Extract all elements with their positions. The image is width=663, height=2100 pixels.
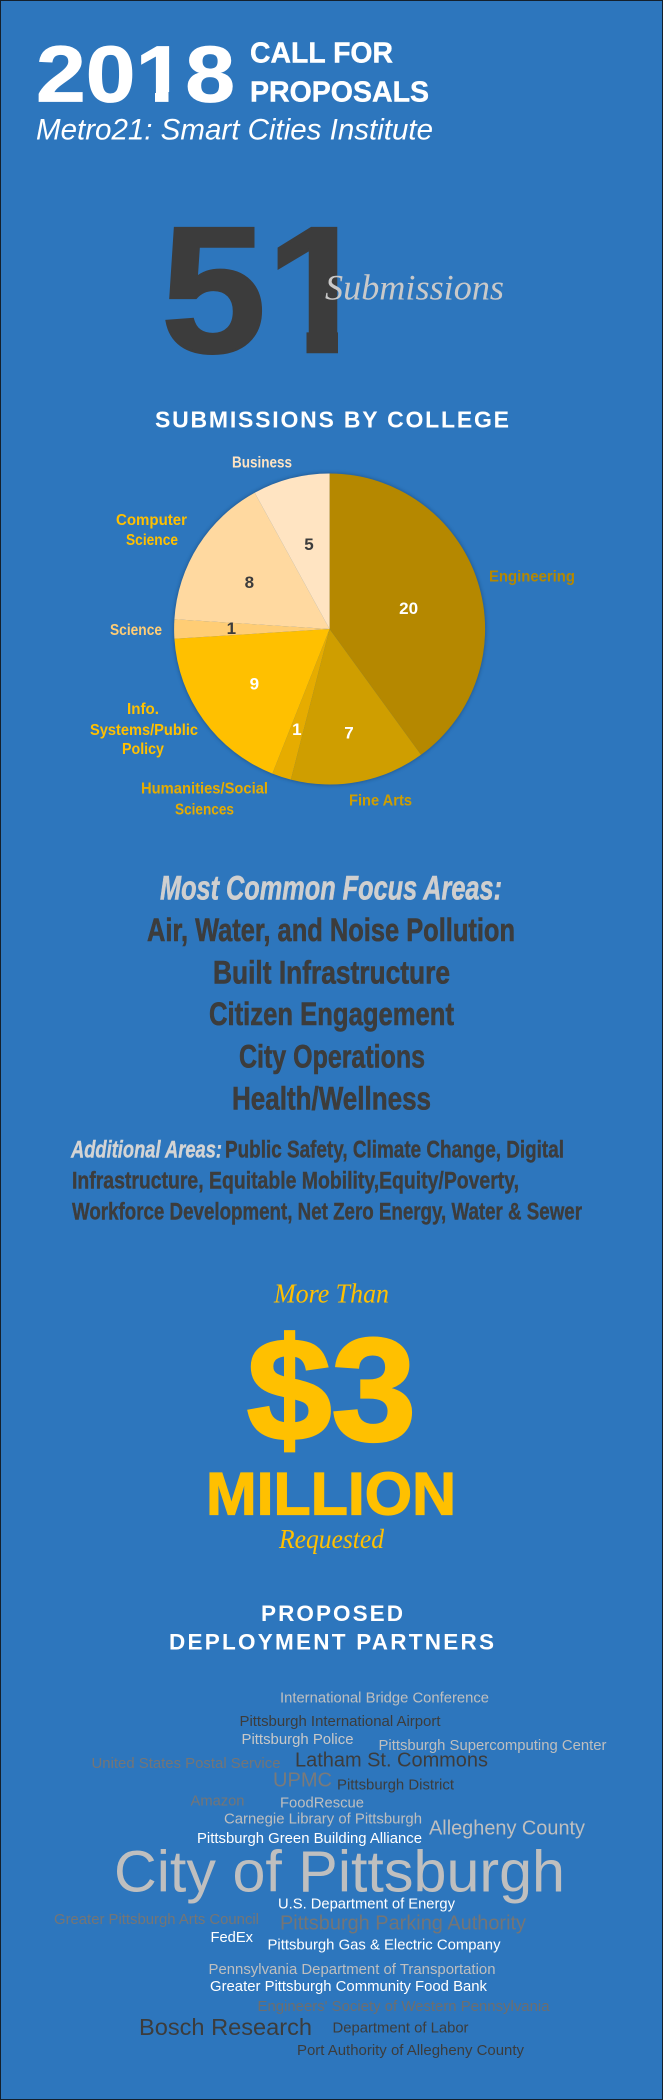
label: humanities social sciences xyxy=(141,780,268,818)
word cloud: Amazon xyxy=(190,1792,244,1809)
word cloud: Pittsburgh Parking Authority xyxy=(280,1912,526,1934)
additional areas: Additional Areas: xyxy=(70,1136,222,1163)
panel: funding requested xyxy=(206,1279,456,1554)
label: fine arts: Fine Arts xyxy=(349,792,412,809)
word cloud: Pittsburgh Green Building Alliance xyxy=(197,1830,422,1847)
word cloud: Carnegie Library of Pittsburgh xyxy=(224,1810,422,1827)
title: call for proposals: PROPOSALS xyxy=(250,77,429,109)
pie values: 20 xyxy=(399,599,418,618)
label: humanities social sciences: Sciences xyxy=(175,801,234,818)
submissions label: Submissions xyxy=(325,267,504,307)
title: call for proposals xyxy=(250,38,429,109)
heading xyxy=(169,1601,494,1654)
word cloud: Pennsylvania Department of Transportation xyxy=(208,1961,496,1978)
additional areas: Public Safety, Climate Change, Digital xyxy=(225,1136,564,1163)
header xyxy=(36,30,433,146)
word cloud: FedEx xyxy=(210,1929,253,1946)
word cloud: Pittsburgh Supercomputing Center xyxy=(378,1737,606,1754)
focus list: Citizen Engagement xyxy=(209,996,454,1032)
label: computer science: Science xyxy=(126,532,178,549)
focus list: Air, Water, and Noise Pollution xyxy=(147,912,515,948)
word cloud: Pittsburgh District xyxy=(337,1776,455,1793)
word cloud: UPMC xyxy=(273,1769,332,1791)
word cloud: United States Postal Service xyxy=(92,1755,280,1772)
label: computer science: Computer xyxy=(116,512,187,529)
focus list: Health/Wellness xyxy=(232,1080,431,1116)
label: humanities social sciences: Humanities/Social xyxy=(141,780,268,797)
pie values: 7 xyxy=(344,723,354,742)
label: computer science xyxy=(116,512,187,549)
pie values: 1 xyxy=(292,720,302,739)
additional areas xyxy=(70,1136,582,1225)
word cloud: Department of Labor xyxy=(332,2020,469,2037)
title: year: 2018 xyxy=(36,30,235,119)
word cloud: Engineers' Society of Western Pennsylvania xyxy=(258,1998,550,2015)
word cloud: International Bridge Conference xyxy=(280,1690,489,1707)
label: info systems public policy: Systems/Public xyxy=(90,722,198,739)
word cloud: City of Pittsburgh xyxy=(114,1840,565,1905)
big amount: $3 xyxy=(247,1308,416,1471)
word cloud: U.S. Department of Energy xyxy=(278,1895,455,1912)
panel: submissions by college xyxy=(90,406,575,818)
label: engineering: Engineering xyxy=(489,568,575,585)
word cloud: Port Authority of Allegheny County xyxy=(297,2042,524,2059)
panel: focus areas xyxy=(70,869,582,1225)
pie chart xyxy=(173,472,486,786)
focus list: City Operations xyxy=(239,1038,425,1074)
label: info systems public policy: Policy xyxy=(122,741,164,758)
subtitle: Metro21: Smart Cities Institute xyxy=(36,113,433,146)
panel: deployment partners xyxy=(54,1601,606,2059)
submissions count xyxy=(161,190,504,391)
word cloud: Pittsburgh Gas & Electric Company xyxy=(268,1936,501,1953)
heading: PROPOSED xyxy=(261,1601,403,1626)
pie values: 9 xyxy=(250,674,259,693)
focus list xyxy=(147,912,515,1116)
pie values: 5 xyxy=(304,535,314,554)
label: business: Business xyxy=(232,454,292,471)
word cloud: Allegheny County xyxy=(429,1817,585,1839)
word cloud: FoodRescue xyxy=(280,1794,364,1811)
label: info systems public policy: Info. xyxy=(127,701,159,718)
title: call for proposals: CALL FOR xyxy=(250,38,393,70)
focus list: Built Infrastructure xyxy=(213,954,450,990)
label: science: Science xyxy=(110,622,162,639)
pie values: 8 xyxy=(245,573,254,592)
heading: SUBMISSIONS BY COLLEGE xyxy=(155,406,509,432)
pie values xyxy=(227,535,418,742)
word cloud: Pittsburgh International Airport xyxy=(240,1713,441,1730)
word cloud xyxy=(54,1690,606,2059)
word cloud: Greater Pittsburgh Community Food Bank xyxy=(210,1978,487,1995)
additional areas: Infrastructure, Equitable Mobility,Equity/Poverty, xyxy=(72,1167,519,1194)
pie values: 1 xyxy=(227,619,236,638)
requested: Requested xyxy=(278,1524,384,1554)
word cloud: Latham St. Commons xyxy=(295,1750,488,1772)
word cloud: Greater Pittsburgh Arts Council xyxy=(54,1911,259,1928)
focus heading: Most Common Focus Areas: xyxy=(160,869,502,907)
million: MILLION xyxy=(206,1460,456,1528)
heading: DEPLOYMENT PARTNERS xyxy=(169,1629,494,1654)
word cloud: Pittsburgh Police xyxy=(242,1731,354,1748)
word cloud: Bosch Research xyxy=(139,2014,312,2040)
more than: More Than xyxy=(273,1279,389,1309)
label: info systems public policy xyxy=(90,701,198,758)
big number 51: 51 xyxy=(161,190,371,391)
